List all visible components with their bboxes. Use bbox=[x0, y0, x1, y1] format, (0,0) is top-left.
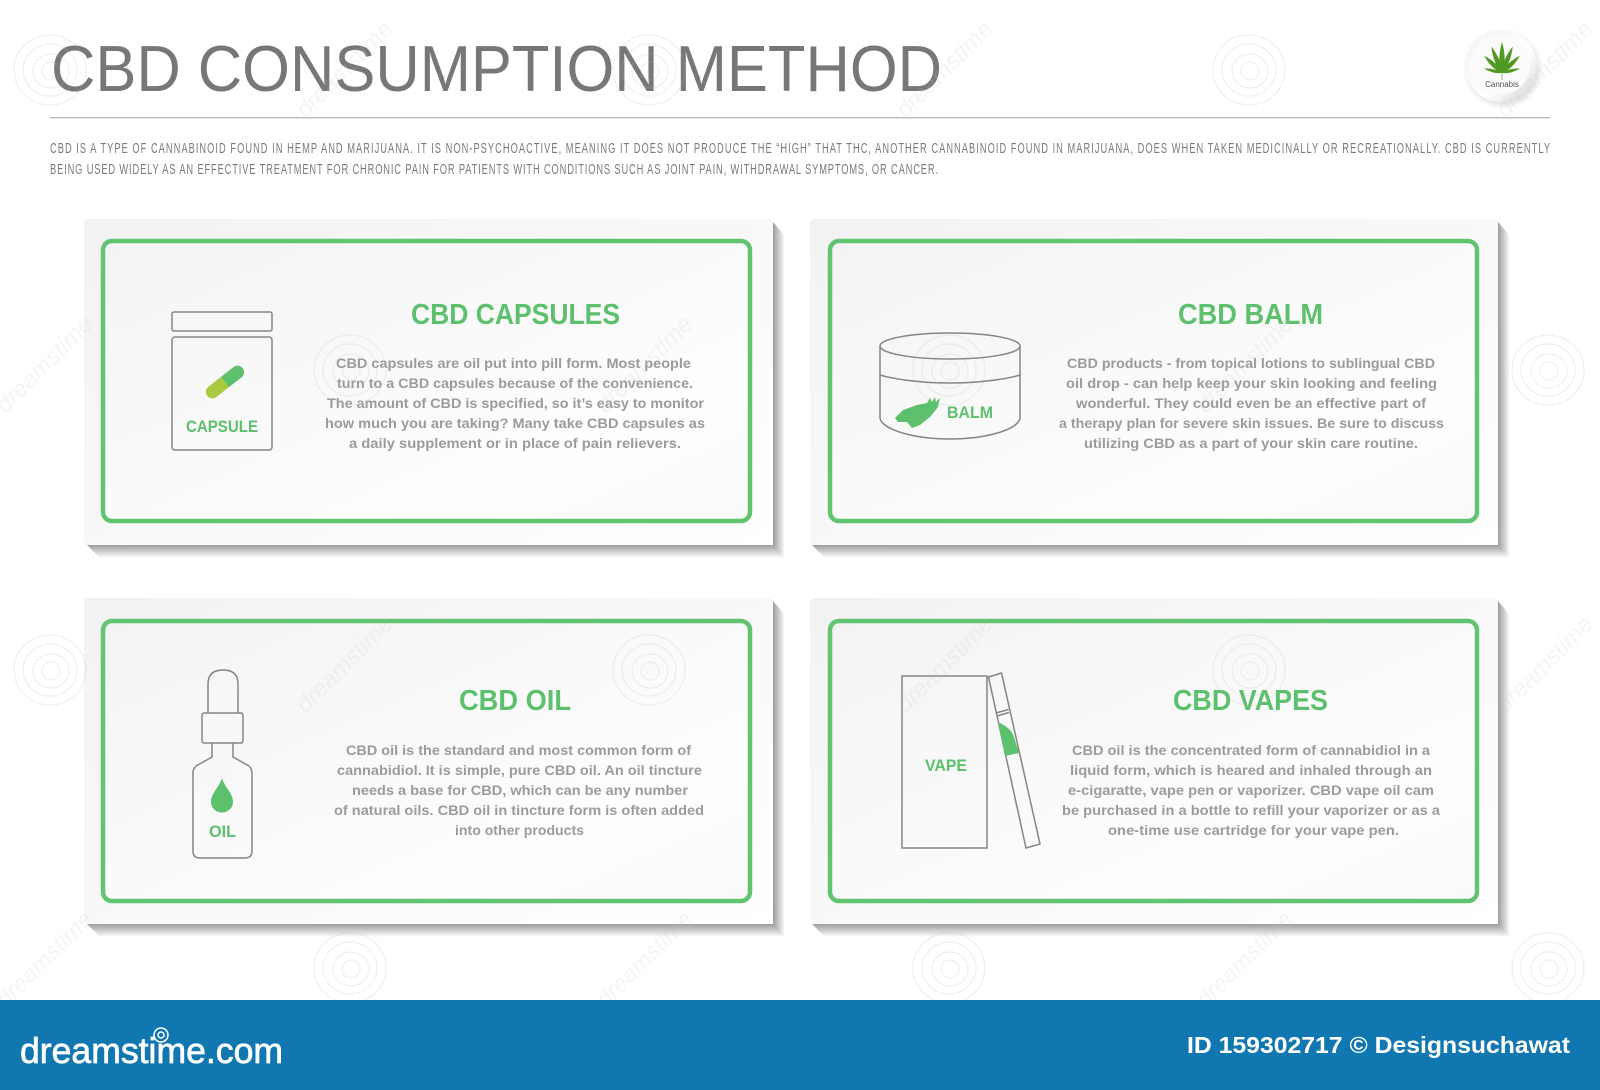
body text: CBD capsules are oil put into pill form. Most people bbox=[336, 355, 691, 371]
icon: spiral bbox=[154, 1028, 168, 1042]
footer bar bbox=[0, 1000, 1600, 1090]
intro paragraph bbox=[50, 140, 1551, 178]
icon: cannabis leaf bbox=[1483, 42, 1521, 80]
intro paragraph: BEING USED WIDELY AS AN EFFECTIVE TREATMENT FOR CHRONIC PAIN FOR PATIENTS WITH CONDITIONS SUCH AS JOINT PAIN, WITHDRAWAL SYMPTOMS, OR CANCER. bbox=[50, 161, 938, 178]
text: dreamstime bbox=[1191, 311, 1299, 419]
icon: balm jar: BALM bbox=[947, 403, 993, 422]
body text: liquid form, which is heared and inhaled through an bbox=[1070, 762, 1432, 778]
text: dreamstime bbox=[1491, 16, 1599, 124]
intro paragraph: CBD IS A TYPE OF CANNABINOID FOUND IN HEMP AND MARIJUANA. IT IS NON-PSYCHOACTIVE, MEANING IT DOES NOT PRODUCE THE “HIGH” THAT THC, ANOTHER CANNABINOID FOUND IN MARIJUANA, DOES WHEN TAKEN MEDICINALLY OR RECREATIONALLY. CBD IS CURRENTLY bbox=[50, 140, 1551, 157]
text: dreamstime bbox=[1191, 906, 1299, 1014]
panel: CBD oil bbox=[84, 598, 785, 937]
body text: of natural oils. CBD oil in tincture form is often added bbox=[334, 802, 704, 818]
text: dreamstime bbox=[1491, 611, 1599, 719]
body text: The amount of CBD is specified, so it’s easy to monitor bbox=[327, 395, 705, 411]
body text: wonderful. They could even be an effective part of bbox=[1075, 395, 1426, 411]
cannabis logo badge bbox=[1465, 30, 1539, 105]
body text: needs a base for CBD, which can be any number bbox=[352, 782, 689, 798]
icon: capsule jar bbox=[172, 312, 272, 450]
body text: utilizing CBD as a part of your skin care routine. bbox=[1084, 435, 1418, 451]
body text: CBD oil is the concentrated form of cannabidiol in a bbox=[1072, 742, 1430, 758]
green frame bbox=[103, 241, 750, 521]
body text bbox=[1062, 742, 1440, 838]
text: dreamstime bbox=[591, 906, 699, 1014]
body text: be purchased in a bottle to refill your vaporizer or as a bbox=[1062, 802, 1440, 818]
text: dreamstime bbox=[891, 16, 999, 124]
body text: into other products bbox=[455, 822, 584, 838]
body text bbox=[1059, 355, 1444, 451]
panel: CBD balm bbox=[810, 219, 1510, 558]
header rule bbox=[50, 117, 1550, 118]
title: CBD CONSUMPTION METHOD bbox=[51, 32, 942, 105]
body text: turn to a CBD capsules because of the convenience. bbox=[337, 375, 693, 391]
body text: e-cigaratte, vape pen or vaporizer. CBD vape oil cam bbox=[1068, 782, 1434, 798]
heading: CBD VAPES bbox=[1173, 685, 1328, 717]
icon: vape box and pen bbox=[902, 673, 1040, 848]
body text: a therapy plan for severe skin issues. Be sure to discuss bbox=[1059, 415, 1444, 431]
body text: oil drop - can help keep your skin looking and feeling bbox=[1066, 375, 1437, 391]
text: dreamstime bbox=[591, 311, 699, 419]
panel: CBD vapes bbox=[810, 598, 1510, 937]
body text: how much you are taking? Many take CBD capsules as bbox=[325, 415, 705, 431]
icon: balm jar bbox=[880, 333, 1020, 439]
heading: CBD CAPSULES bbox=[411, 299, 620, 331]
heading: CBD BALM bbox=[1178, 299, 1323, 331]
green frame bbox=[103, 621, 750, 901]
text: dreamstime bbox=[291, 16, 399, 124]
body text: cannabidiol. It is simple, pure CBD oil. An oil tincture bbox=[337, 762, 702, 778]
body text: one-time use cartridge for your vape pen. bbox=[1108, 822, 1399, 838]
body text bbox=[325, 355, 705, 451]
icon: capsule jar: CAPSULE bbox=[186, 417, 258, 436]
body text bbox=[334, 742, 704, 838]
text: dreamstime bbox=[891, 611, 999, 719]
body text: a daily supplement or in place of pain relievers. bbox=[349, 435, 681, 451]
body text: CBD products - from topical lotions to sublingual CBD bbox=[1067, 355, 1435, 371]
logo label: Cannabis bbox=[1485, 80, 1519, 89]
heading: CBD OIL bbox=[459, 685, 571, 717]
icon: dropper bottle: OIL bbox=[209, 822, 236, 841]
body text: CBD oil is the standard and most common form of bbox=[346, 742, 691, 758]
green frame bbox=[830, 241, 1477, 521]
icon: vape box and pen: VAPE bbox=[925, 756, 967, 775]
icon: dropper bottle bbox=[193, 670, 252, 858]
panel: CBD capsules bbox=[84, 219, 785, 558]
green frame bbox=[830, 621, 1477, 901]
footer brand: dreamstime.com bbox=[20, 1030, 283, 1071]
image id credit: ID 159302717 © Designsuchawat bbox=[1187, 1032, 1570, 1058]
text: dreamstime bbox=[291, 611, 399, 719]
